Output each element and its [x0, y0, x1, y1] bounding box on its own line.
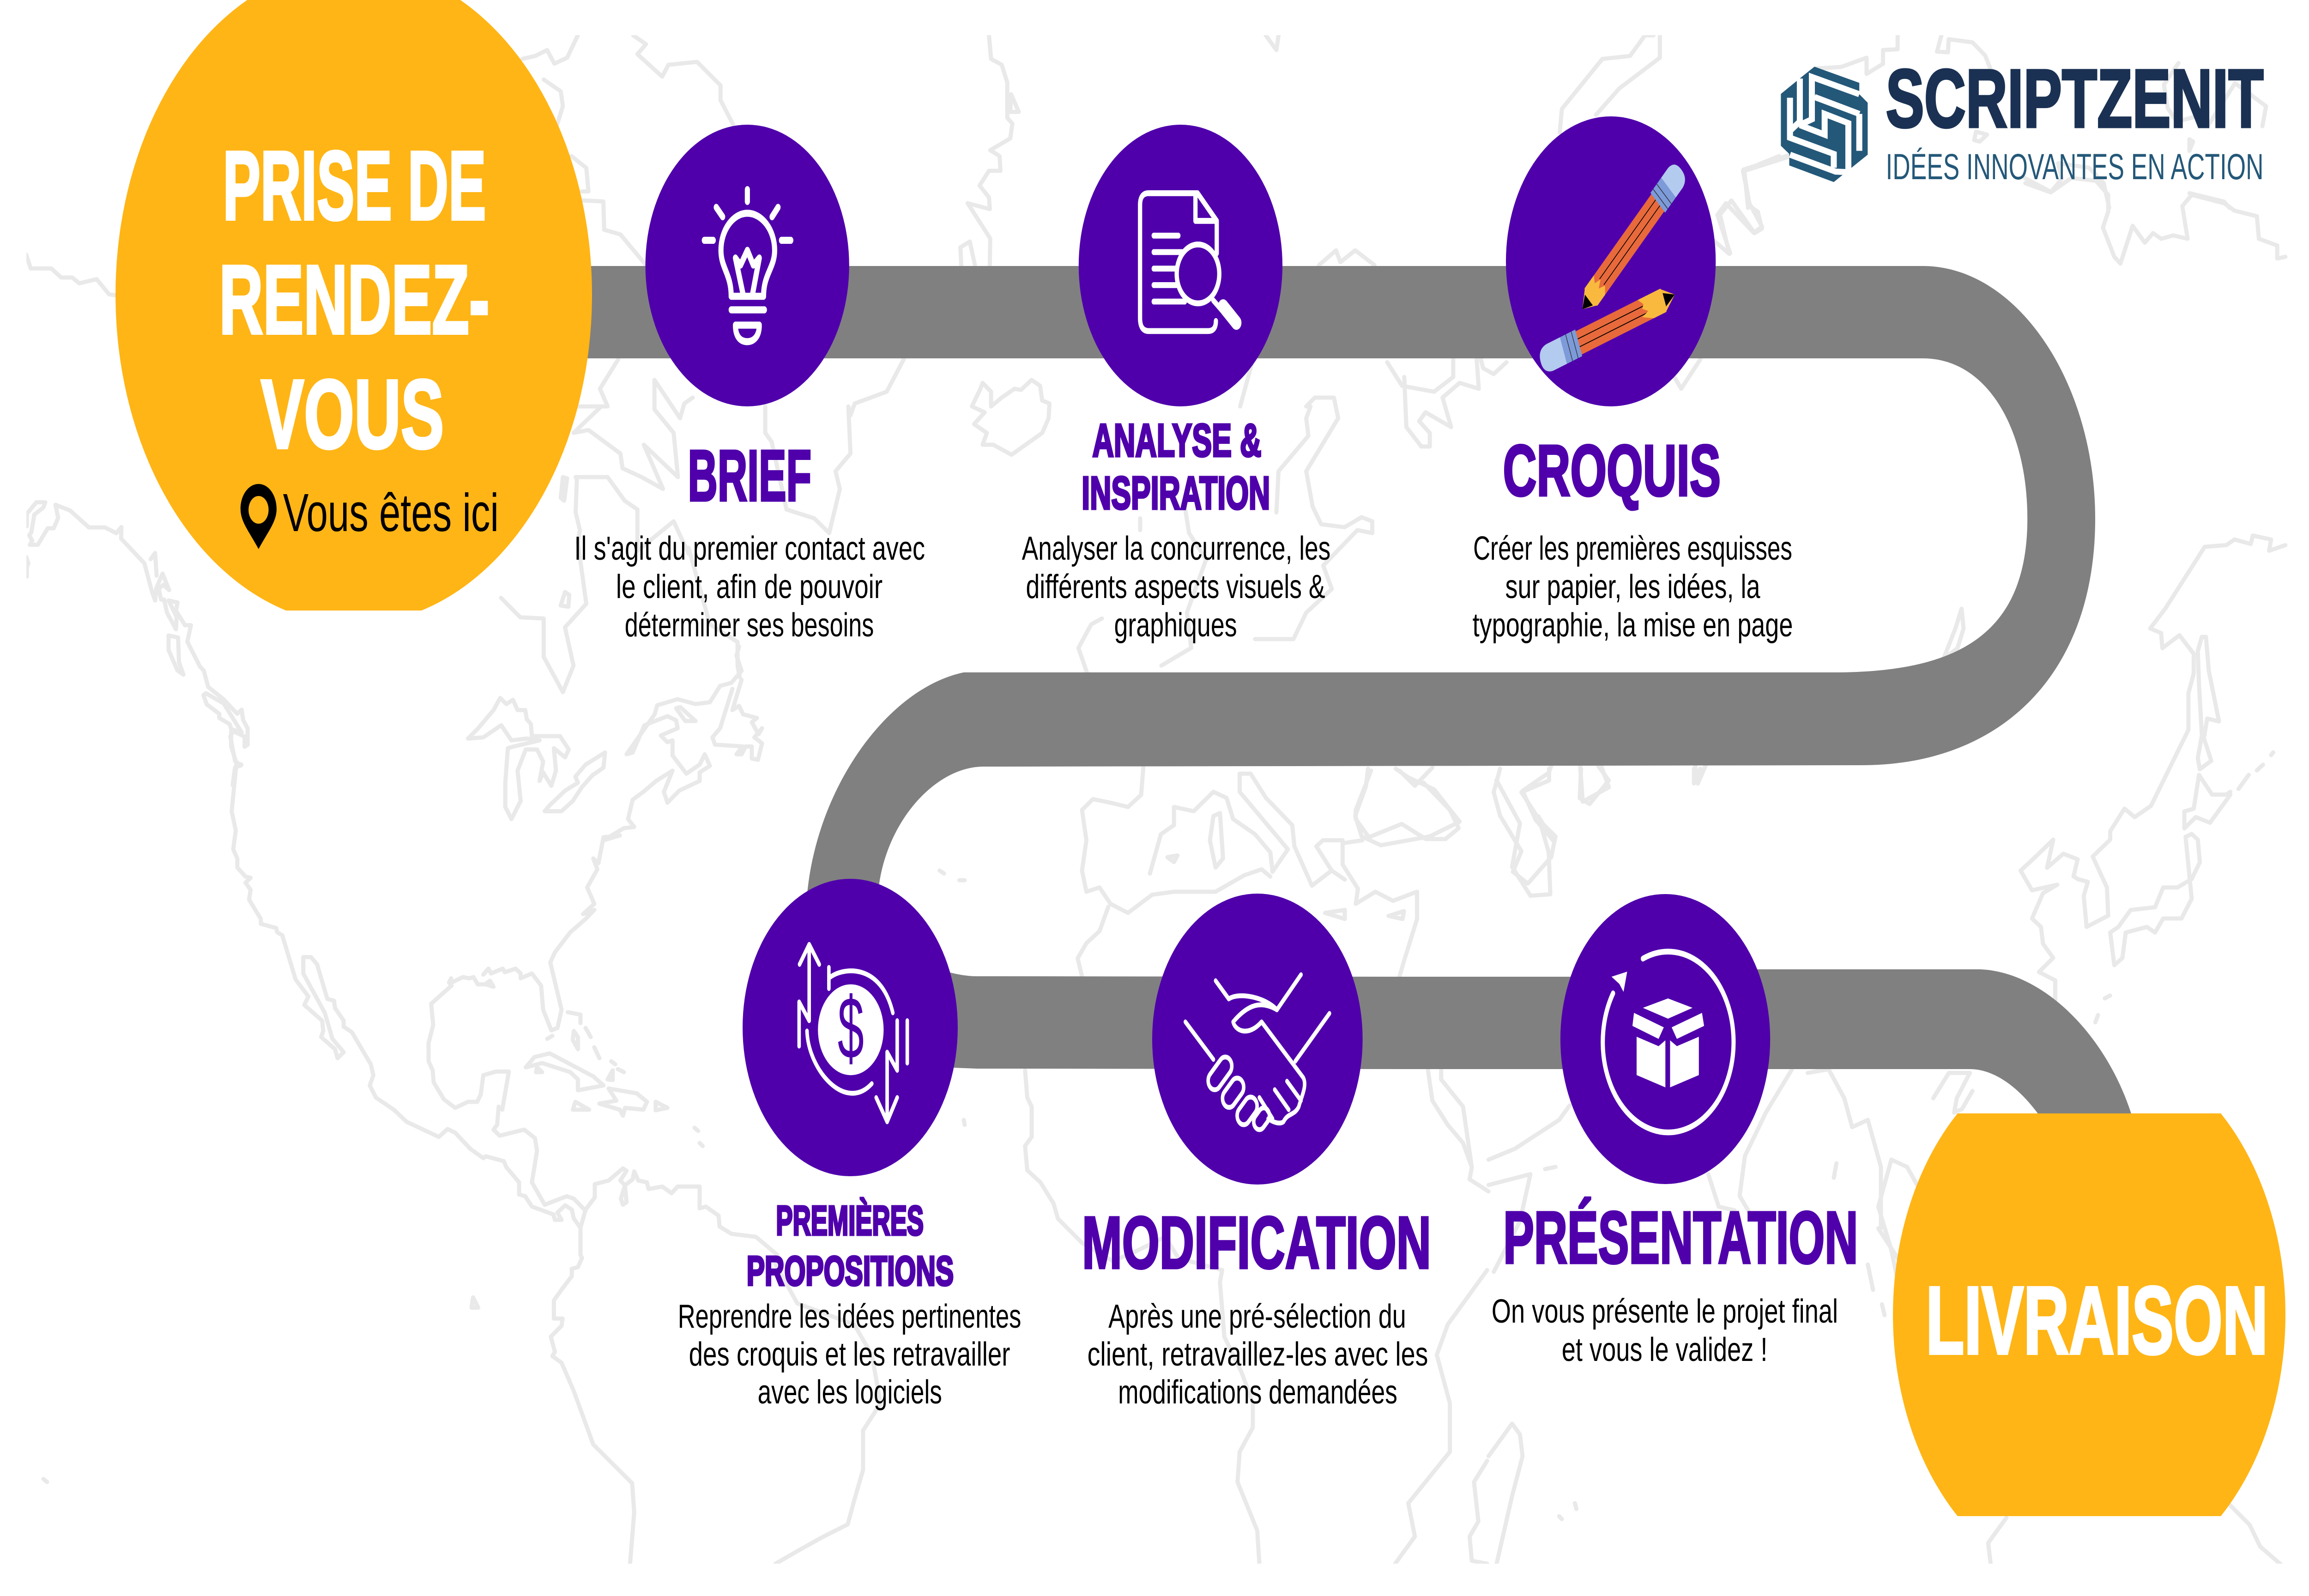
- title: premières propositions: PROPOSITIONS: [747, 1248, 954, 1294]
- step: brief: [574, 125, 925, 644]
- icon: location pin: [241, 484, 277, 549]
- title: croquis: CROQUIS: [1503, 430, 1721, 511]
- title: premières propositions: PREMIÈRES: [776, 1197, 924, 1244]
- heading: livraison: LIVRAISON: [1926, 1267, 2268, 1374]
- text: brief description: Il s'agit du premier contact avec: [574, 530, 925, 567]
- text: modification description: [1088, 1298, 1428, 1411]
- logo mark: [1781, 66, 1868, 182]
- icon: dollar coin with arrows: $: [838, 979, 864, 1077]
- icon: handshake: [1185, 975, 1330, 1133]
- icon: box with circular arrow: [1603, 952, 1734, 1132]
- step: modification: [1082, 894, 1431, 1411]
- end badge: livraison: [1893, 1113, 2285, 1516]
- heading: prise de rendez-vous: PRISE DE: [223, 132, 486, 241]
- icon: two pencils: [1537, 160, 1689, 375]
- start badge: prise de rendez-vous: [115, 0, 592, 611]
- text: modification description: Après une pré-sélection du: [1108, 1298, 1406, 1335]
- text: présentation description: On vous présente le projet final: [1492, 1293, 1838, 1330]
- text: croquis description: typographie, la mise en page: [1473, 607, 1793, 644]
- logo tagline: IDÉES INNOVANTES EN ACTION: [1886, 146, 2264, 187]
- logo name: SCRIPTZENIT: [1886, 53, 2264, 145]
- text: croquis description: Créer les premières esquisses: [1473, 530, 1792, 567]
- text: croquis description: [1473, 530, 1793, 644]
- title: analyse et inspiration: ANALYSE &: [1092, 415, 1261, 466]
- text: présentation description: [1492, 1293, 1838, 1368]
- text: analyse description: Analyser la concurrence, les: [1022, 530, 1330, 567]
- step: croquis: [1473, 116, 1793, 644]
- icon: dollar coin with arrows: [799, 944, 907, 1122]
- text: analyse description: différents aspects visuels &: [1026, 568, 1325, 605]
- grey winding road: [568, 266, 2136, 1131]
- step: premières propositions: [678, 879, 1021, 1411]
- text: croquis description: sur papier, les idées, la: [1505, 568, 1760, 605]
- heading: prise de rendez-vous: RENDEZ-: [219, 246, 490, 355]
- text: premières propositions description: [678, 1298, 1021, 1411]
- title: brief: BRIEF: [688, 435, 811, 516]
- step: présentation: [1492, 894, 1858, 1368]
- heading: prise de rendez-vous: VOUS: [261, 360, 444, 469]
- text: modification description: client, retravaillez-les avec les: [1088, 1336, 1428, 1373]
- text: modification description: modifications demandées: [1118, 1374, 1397, 1411]
- title: analyse et inspiration: INSPIRATION: [1082, 468, 1270, 519]
- text: analyse description: [1022, 530, 1330, 644]
- text: brief description: [574, 530, 925, 644]
- title: modification: MODIFICATION: [1082, 1202, 1431, 1284]
- icon: document with magnifier: [1140, 193, 1236, 331]
- text: premières propositions description: des croquis et les retravailler: [689, 1336, 1010, 1373]
- text: présentation description: et vous le validez !: [1562, 1331, 1767, 1368]
- text: brief description: le client, afin de pouvoir: [616, 568, 882, 605]
- heading: prise de rendez-vous: [219, 132, 490, 469]
- text: premières propositions description: avec les logiciels: [758, 1374, 942, 1411]
- title: analyse et inspiration: [1082, 415, 1270, 519]
- text: analyse description: graphiques: [1114, 607, 1237, 644]
- label: vous êtes ici: Vous êtes ici: [283, 483, 499, 543]
- text: brief description: déterminer ses besoins: [625, 607, 874, 644]
- step: analyse et inspiration: [1022, 125, 1330, 644]
- icon: light bulb: [704, 190, 791, 342]
- logo: scriptzenit: [1781, 53, 2264, 187]
- title: présentation: PRÉSENTATION: [1503, 1197, 1858, 1279]
- title: premières propositions: [747, 1197, 954, 1294]
- text: premières propositions description: Reprendre les idées pertinentes: [678, 1298, 1021, 1335]
